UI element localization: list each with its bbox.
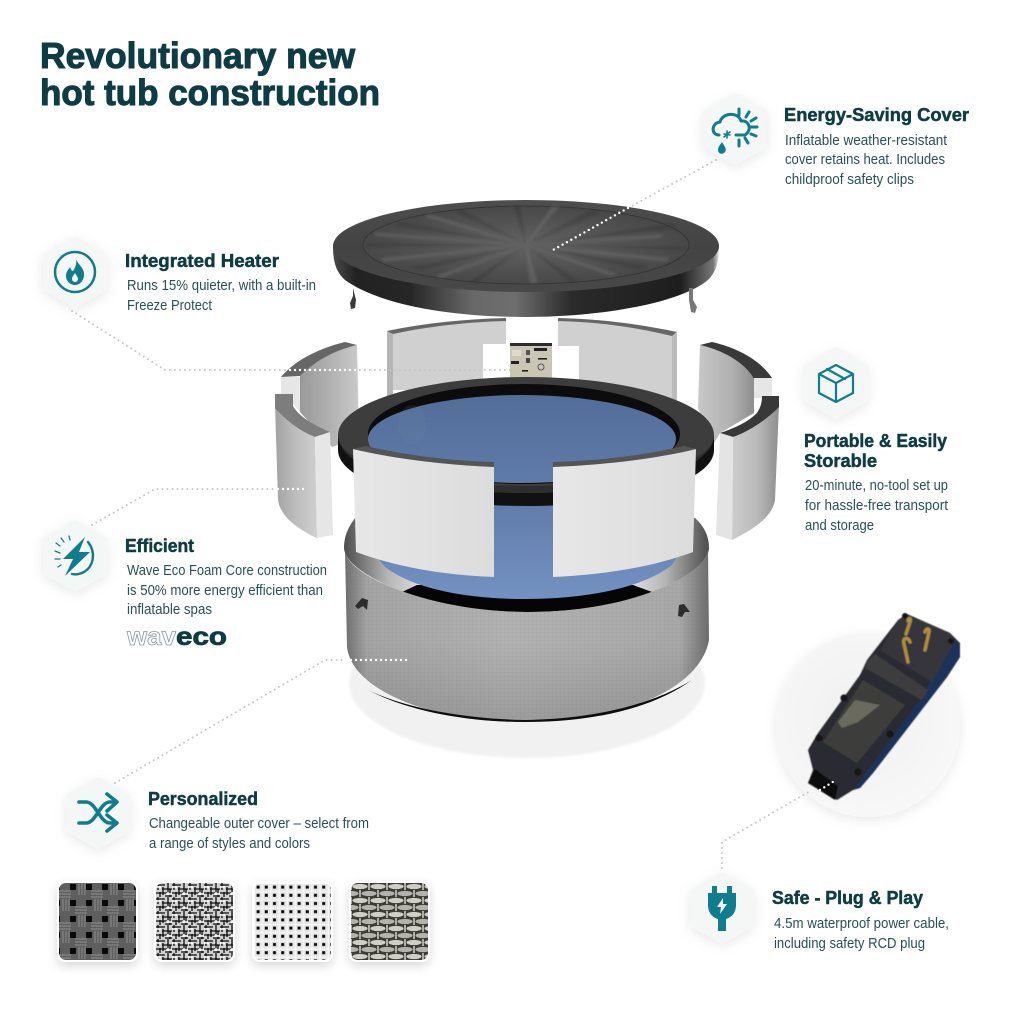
hexagon icon: power plug (690, 872, 754, 944)
description (785, 132, 948, 188)
blue tub bowl (375, 470, 678, 599)
connector: efficient (92, 489, 307, 525)
waveco logo (126, 623, 227, 651)
outer woven base (344, 518, 709, 722)
base interior shadow (402, 585, 652, 612)
back left foam panel (387, 318, 506, 400)
hexagon icon: weather cloud (703, 93, 767, 165)
connector: personalized (115, 660, 408, 783)
description: childproof safety clips (785, 171, 914, 188)
description: and storage (805, 517, 874, 534)
heading: Portable & Easily (804, 431, 947, 451)
description: Runs 15% quieter, with a built-in (127, 277, 316, 294)
swatch: charcoal basket weave (57, 881, 138, 962)
description: inflatable spas (127, 601, 212, 618)
blue side trim (853, 637, 960, 790)
feature: safe plug and play (690, 872, 949, 952)
connector dots on plug (820, 780, 836, 790)
safety clips (350, 288, 356, 309)
feature: personalized (66, 777, 369, 852)
hexagon icon: lightning bolt (43, 520, 107, 592)
title: Revolutionary new (40, 35, 356, 76)
swatch: white mesh (252, 881, 333, 962)
description (127, 277, 316, 314)
integrated heater unit (510, 343, 552, 379)
plug photo on disc (722, 613, 960, 868)
far right foam panel (698, 342, 772, 445)
label (823, 680, 905, 763)
feature: portable and easily storable (804, 347, 949, 534)
right side foam panel (716, 396, 779, 540)
heading: Storable (804, 451, 877, 471)
front right foam panel (553, 446, 696, 577)
swatch: black and white weave (154, 881, 235, 962)
waveco logo: eco (176, 623, 227, 651)
base front wall (345, 548, 709, 722)
base bottom edge (368, 680, 692, 722)
tub rim (338, 377, 714, 506)
front left foam panel (353, 446, 494, 577)
hexagon icon: box (804, 347, 868, 419)
connector: energy-saving cover (553, 160, 716, 250)
description (805, 477, 949, 534)
connector: safe plug (722, 790, 812, 868)
hexagon icon: flame (43, 236, 107, 308)
connector: integrated heater (72, 311, 510, 370)
plug prongs (904, 618, 929, 662)
heading: Safe - Plug & Play (772, 888, 923, 908)
title (40, 35, 380, 113)
left side foam panel (275, 394, 333, 538)
description: Wave Eco Foam Core construction (127, 562, 327, 579)
far left foam panel (281, 342, 359, 447)
waveco logo: wav (126, 623, 176, 651)
feature: efficient (43, 520, 327, 651)
description (127, 562, 327, 618)
description: Inflatable weather-resistant (785, 132, 948, 149)
inflatable cover (333, 200, 719, 317)
hexagon icon: shuffle arrows (66, 777, 130, 849)
cover radial seams (366, 206, 686, 283)
base inner wall (344, 518, 709, 612)
description: cover retains heat. Includes (785, 151, 945, 168)
feature: energy-saving cover (703, 93, 969, 188)
cord (808, 769, 838, 800)
plug head plate (865, 654, 928, 700)
description: for hassle-free transport (805, 497, 949, 514)
heading: Personalized (148, 789, 258, 809)
swatch: silver weave (349, 881, 430, 962)
title: hot tub construction (40, 72, 380, 113)
base handles (355, 598, 690, 617)
screws (815, 613, 954, 776)
heading: Energy-Saving Cover (784, 105, 969, 125)
description: a range of styles and colors (149, 835, 310, 852)
description: 4.5m waterproof power cable, (774, 915, 949, 932)
back right foam panel (558, 318, 677, 400)
description: Freeze Protect (127, 297, 213, 314)
description (774, 915, 949, 952)
description: Changeable outer cover – select from (149, 815, 369, 832)
disc (776, 633, 960, 817)
RCD plug (808, 613, 960, 800)
heading: Efficient (125, 536, 194, 556)
description: 20-minute, no-tool set up (805, 477, 948, 494)
plug body (808, 614, 960, 800)
description (149, 815, 369, 852)
hot tub exploded diagram (275, 200, 779, 758)
feature: integrated heater (43, 236, 316, 314)
heading (804, 431, 947, 471)
heading: Integrated Heater (125, 251, 279, 271)
description: including safety RCD plug (774, 935, 925, 952)
description: is 50% more energy efficient than (127, 582, 323, 599)
ground shadow (349, 608, 705, 758)
